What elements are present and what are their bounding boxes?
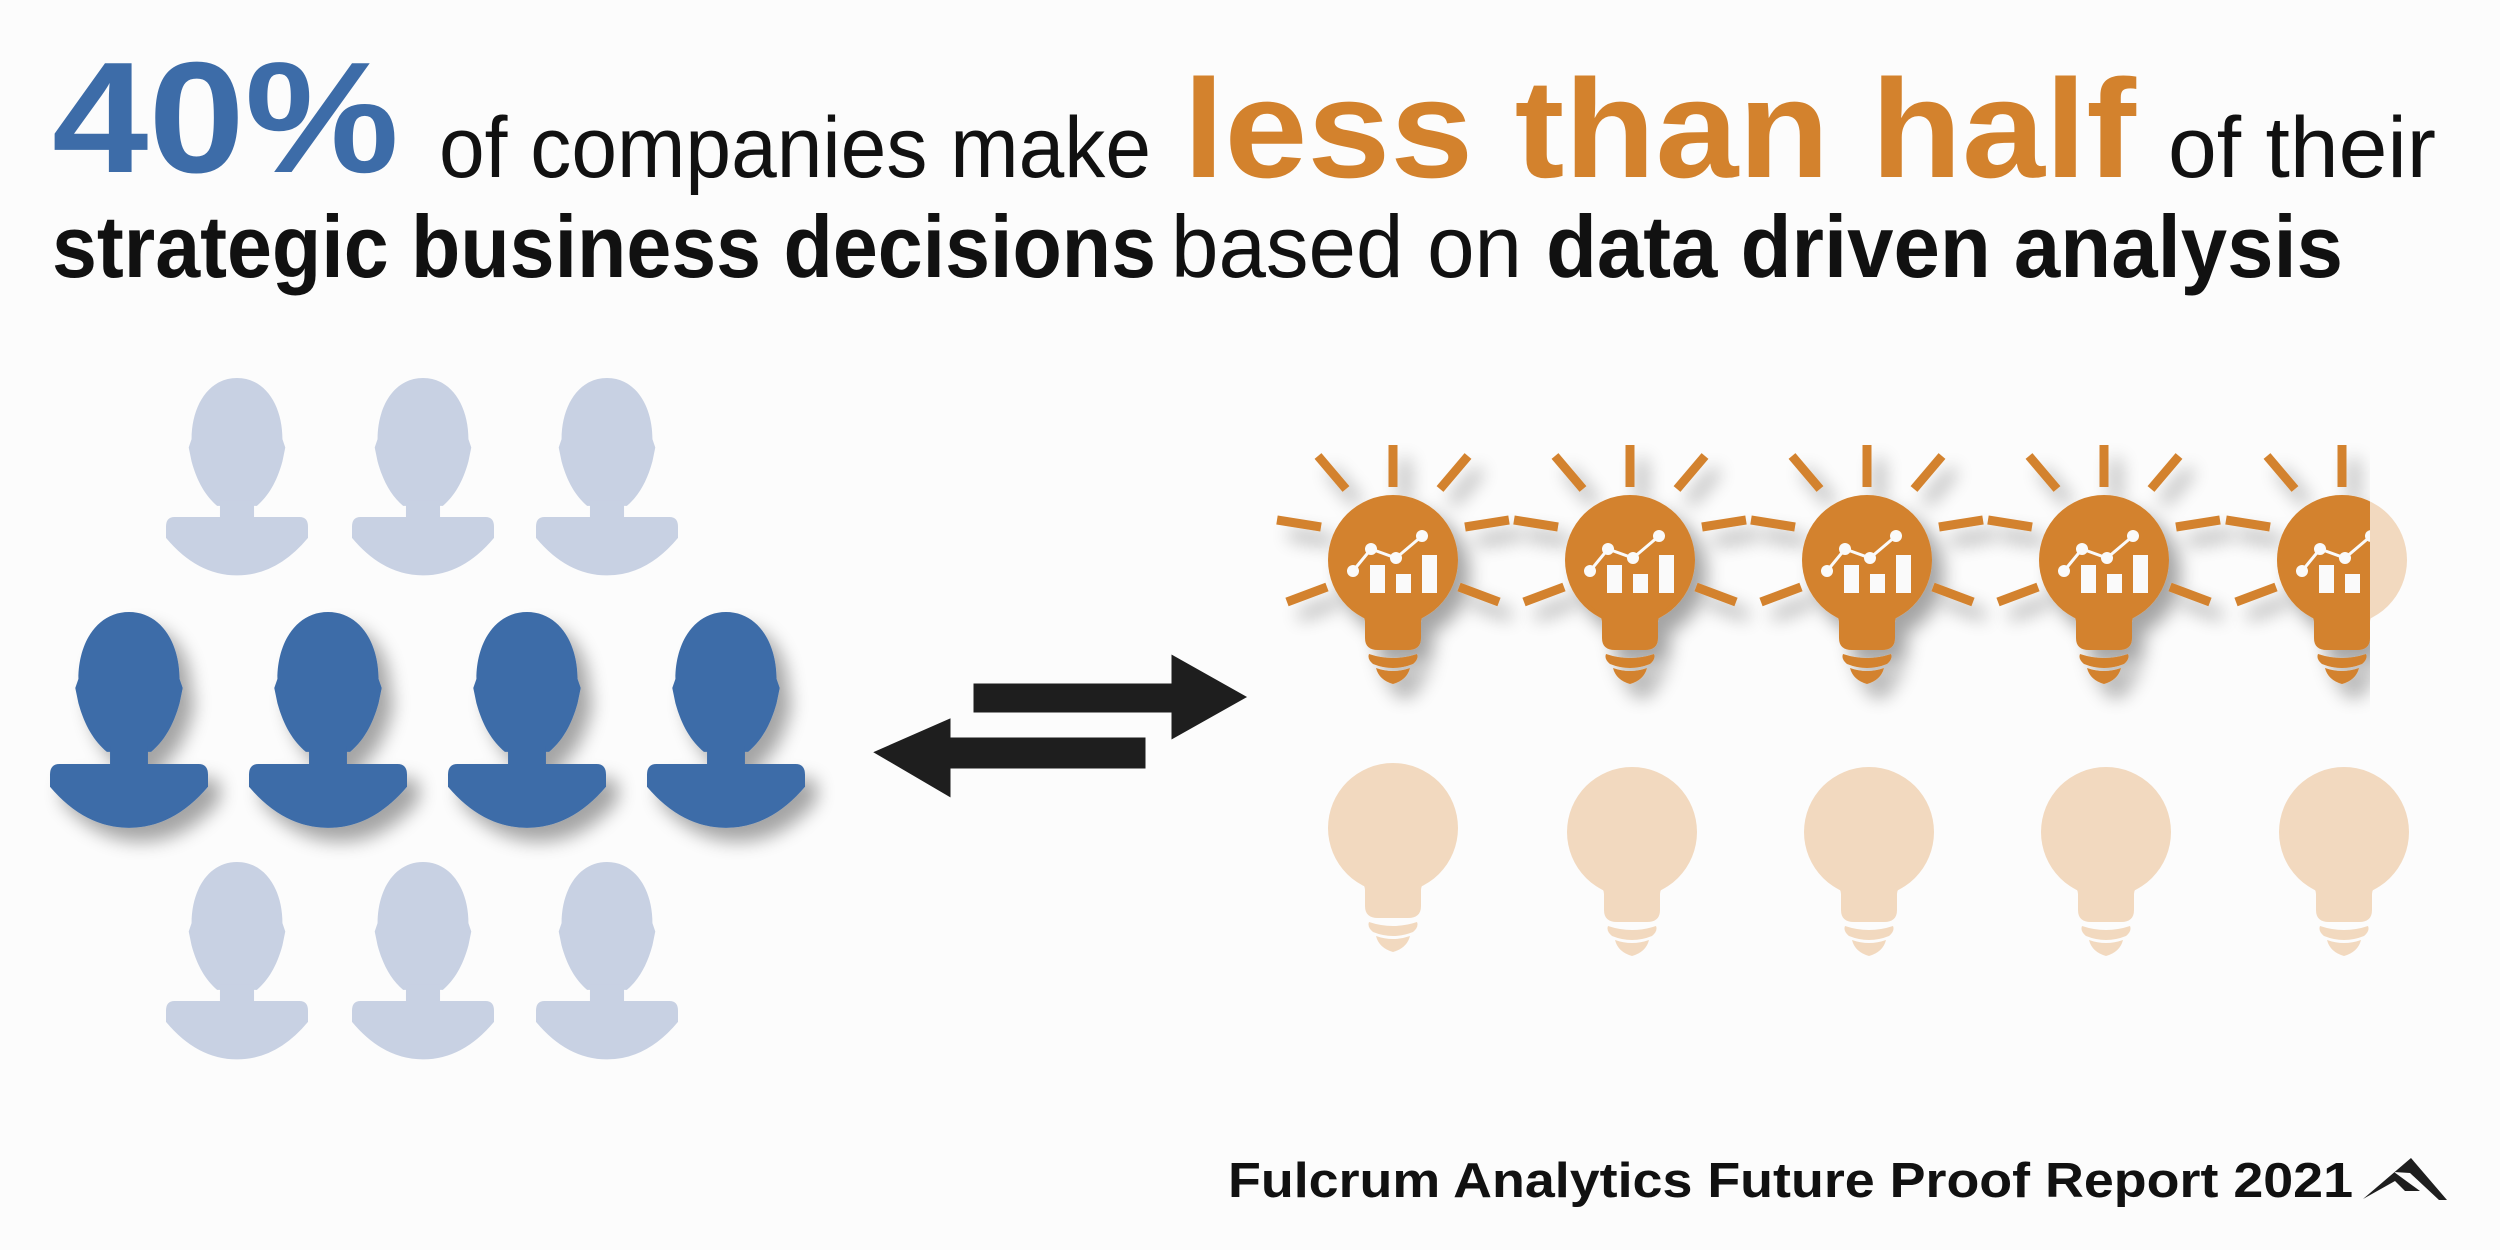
people: top row (light): [166, 378, 678, 575]
title line 1: [52, 30, 2436, 207]
title line 1: of their: [2168, 100, 2436, 196]
title line 2: strategic business decisions: [52, 197, 1156, 296]
footer source: Fulcrum Analytics Future Proof Report 2021: [1228, 1154, 2353, 1208]
unlit bulbs row: [1328, 763, 2409, 956]
lit bulbs row: [1277, 445, 2458, 684]
title line 2: [52, 197, 2343, 296]
title line 2: based on: [1171, 197, 1522, 296]
people: bottom row (light): [166, 862, 678, 1059]
icon: mountain logo: [2363, 1158, 2447, 1200]
title line 2: data driven analysis: [1546, 197, 2343, 296]
title line 1: of companies make: [439, 100, 1151, 196]
title line 1: less than half: [1183, 50, 2136, 207]
arrows: exchange: [870, 652, 1250, 800]
people: middle row (highlighted 40%): [50, 612, 805, 828]
title line 1: 40%: [52, 30, 399, 206]
